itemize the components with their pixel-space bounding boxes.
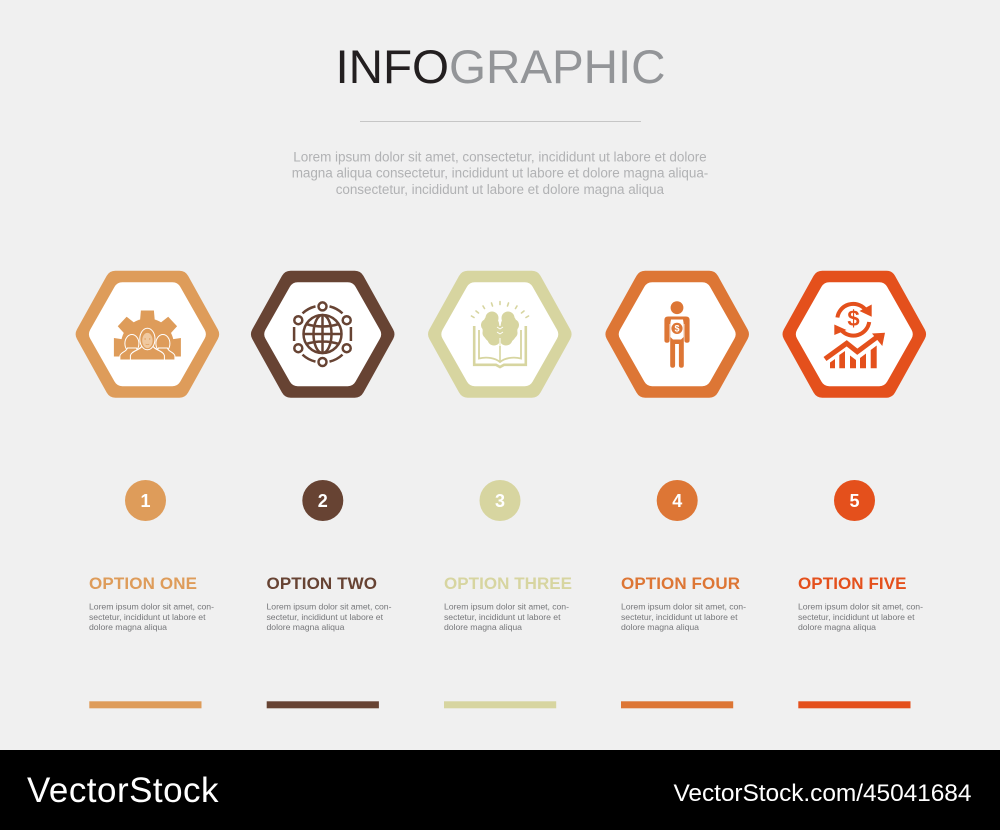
heading: option five: OPTION FIVE xyxy=(798,574,906,593)
intro text: consectetur, incididunt ut labore et dolore magna aliqua xyxy=(336,182,664,197)
intro text xyxy=(292,150,708,197)
bar: option three xyxy=(444,701,556,708)
number badge 5 xyxy=(834,480,875,521)
panel: option two xyxy=(261,281,384,388)
text block: option two: dolore magna aliqua xyxy=(266,622,345,632)
text block: option two: sectetur, incididunt ut labore et xyxy=(266,612,384,622)
side person left xyxy=(120,334,144,360)
bar: option five xyxy=(798,701,910,708)
hexagon one xyxy=(86,281,209,388)
bar: option one xyxy=(89,701,202,708)
book xyxy=(474,326,526,367)
number badge 5: 5 xyxy=(849,491,860,511)
footer logo text: VectorStock xyxy=(27,771,219,810)
panel: option four xyxy=(616,281,739,388)
number badge 4 xyxy=(657,480,698,521)
hexagon five xyxy=(793,281,916,388)
bar: option four xyxy=(621,701,733,708)
text block: option three: Lorem ipsum dolor sit amet, con- xyxy=(444,601,569,611)
panel: option five xyxy=(793,281,916,388)
icon: globe network xyxy=(294,302,351,366)
hexagon four xyxy=(616,281,739,388)
text block: option four: dolore magna aliqua xyxy=(621,622,699,632)
title: INFOGRAPHIC xyxy=(336,41,666,94)
hexagon three xyxy=(438,281,562,388)
text block: option five: sectetur, incididunt ut labore et xyxy=(798,612,915,622)
bar: option two xyxy=(267,701,379,708)
text block: option five: dolore magna aliqua xyxy=(798,622,876,632)
panel: option one xyxy=(86,281,209,388)
number badge 1 xyxy=(125,480,166,521)
text block: option five xyxy=(798,601,923,632)
number badge 2: 2 xyxy=(318,491,328,511)
number badge 1: 1 xyxy=(140,491,151,511)
text block: option two: Lorem ipsum dolor sit amet, con- xyxy=(266,601,392,611)
hexagon two xyxy=(261,281,384,388)
number badge 3 xyxy=(480,480,520,521)
intro text: Lorem ipsum dolor sit amet, consectetur, incididunt ut labore et dolore xyxy=(293,150,707,165)
text block: option one: sectetur, incididunt ut labore et xyxy=(89,612,206,622)
text block: option three: dolore magna aliqua xyxy=(444,622,522,632)
icon: team with gear xyxy=(114,310,181,380)
icon: money cycle and growth chart: $ xyxy=(847,306,860,331)
rays xyxy=(472,302,528,318)
text block: option one: Lorem ipsum dolor sit amet, con- xyxy=(89,601,214,611)
text block: option two xyxy=(266,601,392,632)
text block: option three xyxy=(444,601,569,632)
footer band xyxy=(0,750,1000,830)
center person xyxy=(130,328,164,360)
heading: option one: OPTION ONE xyxy=(89,574,197,593)
brain xyxy=(482,314,500,342)
text block: option three: sectetur, incididunt ut labore et xyxy=(444,612,561,622)
side person right xyxy=(150,334,175,360)
heading: option two: OPTION TWO xyxy=(266,574,377,593)
text block: option four: sectetur, incididunt ut labore et xyxy=(621,612,738,622)
text block: option four xyxy=(621,601,746,632)
icon: brain and open book xyxy=(472,302,528,367)
panel: option three xyxy=(438,281,562,388)
number badge 4: 4 xyxy=(672,491,682,511)
text block: option one xyxy=(89,601,214,632)
heading: option four: OPTION FOUR xyxy=(621,574,740,593)
text block: option five: Lorem ipsum dolor sit amet, con- xyxy=(798,601,923,611)
text block: option four: Lorem ipsum dolor sit amet, con- xyxy=(621,601,746,611)
footer url: VectorStock.com/45041684 xyxy=(674,780,972,807)
heading: option three: OPTION THREE xyxy=(444,574,572,593)
intro text: magna aliqua consectetur, incididunt ut labore et dolore magna aliqua- xyxy=(292,166,708,181)
number badge 3: 3 xyxy=(495,491,505,511)
number badge 2 xyxy=(302,480,343,521)
icon: person with dollar: $ xyxy=(674,324,680,334)
text block: option one: dolore magna aliqua xyxy=(89,622,167,632)
